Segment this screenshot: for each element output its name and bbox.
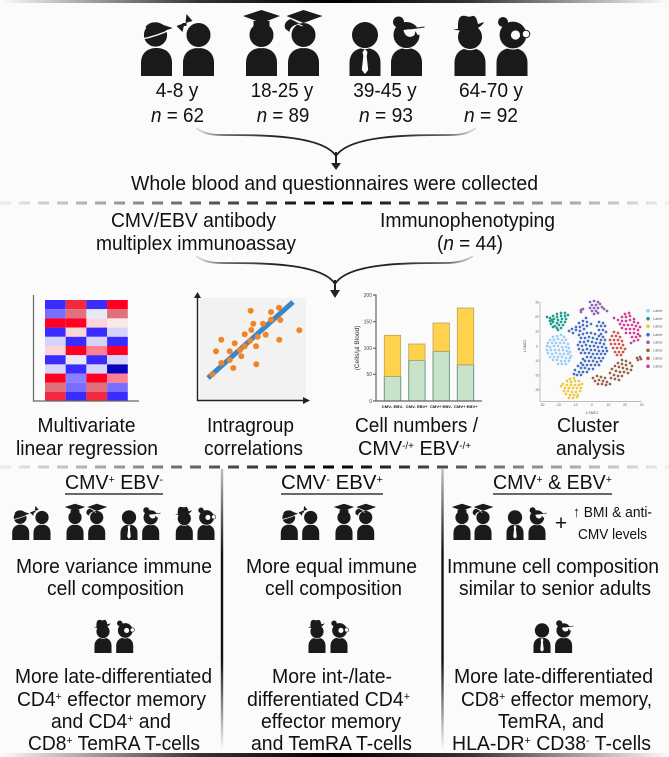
text: plus BMI and anti-CMV levels bbox=[555, 504, 652, 543]
caption: cell numbers bbox=[355, 415, 478, 460]
sample sizes: n = 92 bbox=[464, 105, 518, 127]
bar chart: cell numbers: CMV- EBV- bbox=[382, 405, 404, 409]
icon: young adults and adults bbox=[452, 504, 547, 540]
heading: CMV- EBV+: - bbox=[326, 474, 330, 486]
bar chart: cell numbers: 100 bbox=[364, 346, 372, 352]
icon: children and young adults bbox=[281, 504, 376, 540]
text: antibody assay: multiplex immunoassay bbox=[96, 233, 296, 255]
cluster plot: t-SNE: Label bbox=[653, 333, 662, 337]
text: late-differentiated finding: effector memory bbox=[62, 689, 206, 711]
text: senior-like composition finding: Immune cell composition bbox=[447, 556, 659, 578]
caption: cell numbers: EBV bbox=[414, 438, 460, 460]
heading: CMV+ & EBV+: CMV bbox=[493, 472, 537, 494]
text: equal composition finding: More equal immune bbox=[246, 556, 417, 578]
heading: CMV- EBV+: EBV bbox=[330, 472, 377, 494]
heading: CMV+ EBV-: + bbox=[109, 474, 115, 486]
icon: all four age groups bbox=[12, 504, 216, 540]
heading: CMV- EBV+: + bbox=[376, 474, 383, 486]
cluster plot: t-SNE: 10 bbox=[607, 403, 610, 407]
bar chart: cell numbers bbox=[354, 293, 482, 409]
bar chart: cell numbers: 0 bbox=[369, 399, 372, 405]
cluster plot: t-SNE: -10 bbox=[535, 359, 540, 363]
bar chart: cell numbers: 200 bbox=[364, 293, 372, 299]
icon: children 4-8 y bbox=[141, 14, 214, 76]
text: senior-like composition finding bbox=[447, 556, 659, 600]
text: CD8 late-differentiated finding: + bbox=[525, 735, 531, 747]
text: variance finding: More variance immune bbox=[16, 556, 212, 578]
text: CD8 late-differentiated finding: effector memory, bbox=[505, 689, 652, 711]
text: immunophenotyping bbox=[380, 210, 555, 255]
caption: cluster analysis: Cluster bbox=[557, 415, 619, 437]
cluster plot: t-SNE: 30 bbox=[640, 403, 644, 407]
caption: cell numbers: CMV bbox=[358, 438, 402, 460]
cluster plot: t-SNE: -20 bbox=[556, 403, 561, 407]
panel: study cohort bbox=[141, 10, 530, 127]
text: CD8 late-differentiated finding: More late-differentiated bbox=[454, 666, 653, 688]
cluster plot: t-SNE: Label bbox=[653, 365, 662, 369]
top gradient bar bbox=[0, 0, 669, 3]
text: int-/late-differentiated finding: effector memory bbox=[261, 711, 401, 733]
text: CD8 late-differentiated finding: + bbox=[499, 691, 505, 703]
bar chart: cell numbers: CMV+ EBV- bbox=[430, 405, 453, 409]
heading: CMV+ EBV- bbox=[65, 472, 163, 494]
age labels: 64-70 y bbox=[459, 80, 523, 102]
text: late-differentiated finding: and bbox=[133, 711, 171, 733]
arrow: cohort brace to sample collection bbox=[196, 128, 476, 170]
caption: multivariate linear regression bbox=[16, 415, 158, 460]
bar chart: cell numbers: (Cells/µl Blood) bbox=[354, 326, 361, 370]
heading: CMV- EBV+: CMV bbox=[281, 472, 325, 494]
text: immunophenotyping: (n = 44) bbox=[437, 233, 503, 255]
age labels: 18-25 y bbox=[251, 80, 313, 102]
age labels bbox=[156, 80, 523, 102]
cluster plot: t-SNE: -30 bbox=[535, 388, 540, 392]
cluster plot: t-SNE: Label bbox=[653, 341, 662, 345]
text: int-/late-differentiated finding bbox=[247, 666, 412, 755]
text: variance finding bbox=[16, 556, 212, 600]
text: int-/late-differentiated finding: + bbox=[404, 691, 410, 703]
text: int-/late-differentiated finding: differentiated CD4 bbox=[247, 689, 408, 711]
cluster plot: t-SNE: -20 bbox=[535, 374, 540, 378]
cluster plot: t-SNE: Label bbox=[653, 357, 662, 361]
caption: cell numbers: -/+ bbox=[459, 441, 471, 452]
caption: intragroup correlations: Intragroup bbox=[207, 415, 294, 437]
cluster plot: t-SNE: -30 bbox=[540, 403, 545, 407]
text: sample collection: Whole blood and questionnaires were collected bbox=[131, 173, 538, 195]
cluster plot: t-SNE: 0 bbox=[591, 403, 593, 407]
icon: seniors 64-70 y bbox=[453, 16, 530, 76]
text: CD8 late-differentiated finding: CD8 bbox=[461, 689, 501, 711]
bar chart: cell numbers: CMV- EBV+ bbox=[406, 405, 428, 409]
text: variance finding: cell composition bbox=[47, 578, 184, 600]
heading: CMV+ & EBV+ bbox=[493, 472, 612, 494]
heading: CMV+ & EBV+: + bbox=[606, 474, 612, 486]
cluster plot: t-SNE: t-SNE1 bbox=[586, 411, 598, 415]
heading: CMV+ EBV-: EBV bbox=[115, 472, 160, 494]
text: immunophenotyping: Immunophenotyping bbox=[380, 210, 555, 232]
bar chart: cell numbers: 150 bbox=[364, 320, 372, 326]
icon: adults bbox=[533, 620, 574, 653]
scatter plot: intragroup correlations bbox=[194, 292, 310, 404]
bottom gradient bar bbox=[0, 753, 669, 757]
cluster plot: t-SNE: -10 bbox=[573, 403, 578, 407]
cluster plot: t-SNE: 10 bbox=[535, 330, 539, 334]
caption: cluster analysis: analysis bbox=[556, 438, 625, 460]
heading: CMV- EBV+ bbox=[281, 472, 383, 494]
heat map: multivariate linear regression bbox=[34, 295, 139, 401]
cluster plot: t-SNE: Label bbox=[653, 349, 662, 353]
cluster plot: t-SNE: 0 bbox=[536, 344, 538, 348]
text: equal composition finding bbox=[246, 556, 417, 600]
text: int-/late-differentiated finding: and TemRA T-cells bbox=[251, 733, 412, 755]
text: late-differentiated finding: More late-differentiated bbox=[15, 666, 212, 688]
bar chart: cell numbers: CMV+ EBV+ bbox=[454, 405, 478, 409]
text: late-differentiated finding: CD4 bbox=[17, 689, 57, 711]
caption: intragroup correlations bbox=[204, 415, 303, 460]
cluster plot: t-SNE: Label bbox=[653, 309, 662, 313]
cluster plot: t-SNE: 20 bbox=[623, 403, 627, 407]
cluster plot: t-SNE: 20 bbox=[535, 315, 539, 319]
text: CD8 late-differentiated finding: T-cells bbox=[590, 733, 651, 755]
text: plus BMI and anti-CMV levels: ↑ BMI & anti- bbox=[573, 504, 652, 521]
heading: CMV+ & EBV+: & EBV bbox=[543, 472, 606, 494]
icon: seniors bbox=[308, 620, 349, 653]
heading: CMV+ & EBV+: + bbox=[536, 474, 543, 486]
caption: cell numbers: -/+ bbox=[402, 441, 414, 452]
sample sizes: n = 89 bbox=[257, 105, 309, 127]
heading: CMV+ EBV-: CMV bbox=[65, 472, 109, 494]
age labels: 4-8 y bbox=[156, 80, 198, 102]
text: late-differentiated finding bbox=[15, 666, 212, 755]
arrow: assays brace to analyses bbox=[196, 256, 473, 298]
text: late-differentiated finding: and CD4 bbox=[51, 711, 130, 733]
text: antibody assay bbox=[96, 210, 296, 255]
text: equal composition finding: cell composition bbox=[265, 578, 402, 600]
text: antibody assay: CMV/EBV antibody bbox=[111, 210, 276, 232]
cluster plot: t-SNE bbox=[523, 300, 662, 415]
text: late-differentiated finding: + bbox=[127, 713, 133, 725]
cluster plot: t-SNE: Label bbox=[653, 317, 662, 321]
caption: intragroup correlations: correlations bbox=[204, 438, 303, 460]
panel: CMV+ & EBV+ bbox=[447, 472, 659, 755]
text: CD8 late-differentiated finding: - bbox=[586, 735, 590, 747]
text: late-differentiated finding: + bbox=[56, 691, 62, 703]
text: late-differentiated finding: TemRA T-cells bbox=[73, 733, 200, 755]
caption: multivariate linear regression: linear regression bbox=[16, 438, 158, 460]
text: late-differentiated finding: CD8 bbox=[28, 733, 68, 755]
cluster plot: t-SNE: 30 bbox=[535, 300, 539, 304]
caption: cell numbers: Cell numbers / bbox=[355, 415, 478, 437]
text: CD8 late-differentiated finding: CD38 bbox=[531, 733, 586, 755]
icon: seniors bbox=[94, 620, 134, 653]
icon: young adults 18-25 y bbox=[243, 10, 322, 76]
text: CD8 late-differentiated finding: TemRA, and bbox=[498, 711, 604, 733]
age labels: 39-45 y bbox=[353, 80, 417, 102]
caption: multivariate linear regression: Multivariate bbox=[38, 415, 136, 437]
sample sizes: n = 93 bbox=[359, 105, 413, 127]
text: CD8 late-differentiated finding bbox=[452, 666, 653, 755]
icon: adults 39-45 y bbox=[350, 16, 426, 76]
cluster plot: t-SNE: Label bbox=[653, 325, 662, 329]
caption: cluster analysis bbox=[556, 415, 625, 460]
panel: CMV- EBV+ bbox=[246, 472, 417, 755]
text: plus BMI and anti-CMV levels: CMV levels bbox=[578, 526, 647, 543]
text: int-/late-differentiated finding: More int-/late- bbox=[272, 666, 392, 688]
text: plus BMI and anti-CMV levels: + bbox=[555, 512, 567, 535]
text: senior-like composition finding: similar to senior adults bbox=[459, 578, 651, 600]
heading: CMV+ EBV-: - bbox=[159, 474, 163, 486]
sample sizes bbox=[151, 105, 518, 127]
text: CD8 late-differentiated finding: HLA-DR bbox=[452, 733, 526, 755]
bar chart: cell numbers: 50 bbox=[366, 372, 372, 378]
sample sizes: n = 62 bbox=[151, 105, 204, 127]
panel: CMV+ EBV- bbox=[12, 472, 216, 755]
text: late-differentiated finding: + bbox=[66, 735, 73, 747]
cluster plot: t-SNE: t-SNE2 bbox=[523, 340, 527, 352]
